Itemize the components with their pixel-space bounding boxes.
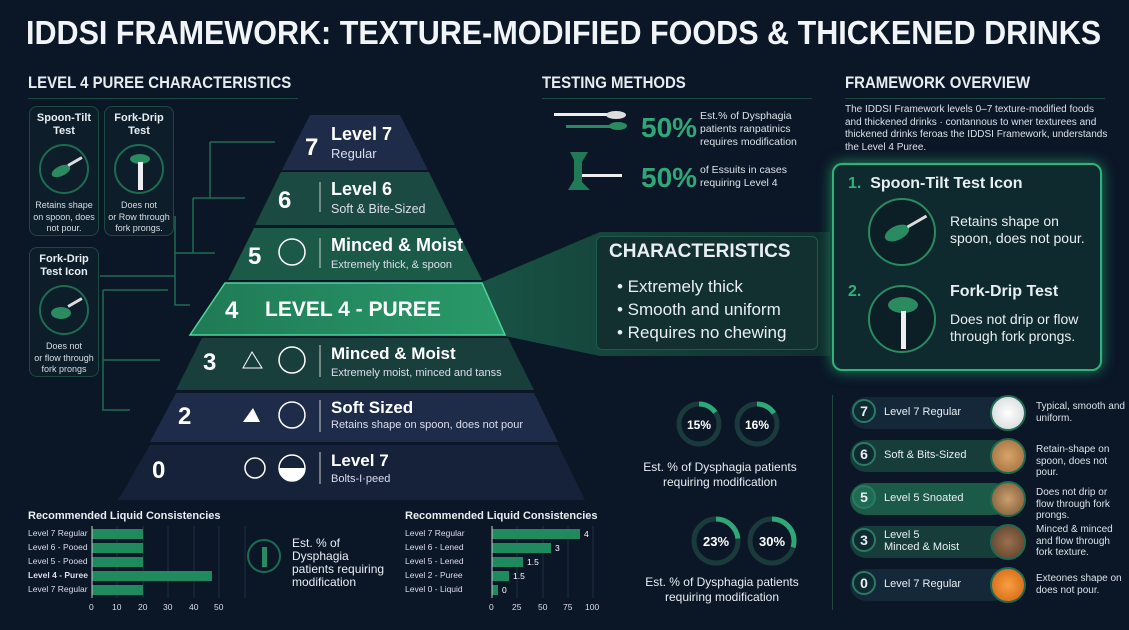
bar chart 2: 75: [563, 602, 573, 612]
row 0: [850, 567, 1122, 603]
row 7: Level 7 Regular: [884, 406, 961, 418]
bar chart 2: Recommended Liquid Consistencies: [405, 510, 598, 522]
level 0 band: [118, 445, 585, 500]
level 3 band: [176, 338, 534, 390]
card: fork-drip test: Fork-Drip: [114, 112, 164, 124]
bar chart 1: 40: [189, 602, 199, 612]
bar chart 2: Level 7 Regular: [405, 528, 465, 538]
bar chart 1: Level 5 - Pooed: [28, 556, 88, 566]
highlight panel: tests: through fork prongs.: [950, 328, 1075, 344]
bar chart 1: 0: [89, 602, 94, 612]
bar chart 1: 20: [138, 602, 148, 612]
card: fork-drip test: or Row through fork prongs.: [108, 212, 170, 233]
level 5 band: 5: [248, 243, 261, 270]
arrows: cards to pyramid: [100, 141, 275, 411]
testing methods stats: [554, 110, 797, 193]
heading: testing methods: TESTING METHODS: [542, 73, 686, 92]
level 3 band: Minced & Moist: [331, 344, 456, 363]
card: fork-drip test: Does not: [121, 200, 157, 210]
card: fork-drip test icon: Test Icon: [40, 266, 88, 278]
bar chart 1: 50: [214, 602, 224, 612]
row 7: Typical, smooth and uniform.: [1036, 401, 1125, 424]
level 2 band: Retains shape on spoon, does not pour: [331, 419, 523, 431]
card: spoon-tilt test: Retains shape on spoon, does not pour.: [33, 200, 95, 233]
card: spoon-tilt test: Spoon-Tilt: [37, 112, 91, 124]
highlight panel: tests: spoon, does not pour.: [950, 230, 1085, 246]
level 4 band: [190, 283, 505, 335]
bar chart 1: Level 4 - Puree: [28, 570, 88, 580]
bar chart 1: [28, 510, 246, 612]
donuts row 2: [645, 516, 799, 604]
level 7 band: Level 7: [331, 124, 392, 144]
bar chart 2: 100: [585, 602, 599, 612]
icon: fork circle with est text: Dysphagia: [292, 549, 349, 563]
donuts row 1: [643, 402, 797, 489]
highlight panel: tests: [832, 163, 1102, 371]
donuts row 2: 30%: [759, 534, 785, 549]
level list: [850, 395, 1125, 603]
level 3 band: 3: [203, 349, 216, 376]
testing methods stats: Est.% of Dysphagia: [700, 110, 792, 122]
icon: spoon tilt: [868, 198, 936, 266]
bar chart 1: Level 6 - Pooed: [28, 542, 88, 552]
card: fork-drip test: [104, 106, 174, 236]
level 5 band: [228, 228, 482, 280]
card: spoon-tilt test: Test: [53, 125, 75, 137]
level 7 band: Regular: [331, 146, 377, 161]
testing methods stats: 50%: [641, 112, 697, 143]
row 6: Retain-shape on spoon, does not pour.: [1036, 444, 1109, 478]
heading: framework overview: [845, 73, 1105, 99]
row 3: Level 5: [884, 529, 919, 541]
bar chart 2: 0: [502, 585, 507, 595]
level 7 band: 7: [305, 134, 318, 161]
card: spoon-tilt test: [29, 106, 99, 236]
level 6 band: [255, 172, 455, 225]
card: fork-drip test icon: or flow through fork prongs: [34, 352, 94, 374]
testing methods stats: 50%: [641, 162, 697, 193]
level 4 band: LEVEL 4 - PUREE: [265, 298, 441, 321]
characteristics box: • Smooth and uniform: [617, 300, 781, 319]
bar chart 2: Level 0 - Liquid: [405, 584, 463, 594]
donuts row 2: 23%: [703, 534, 729, 549]
highlight panel: tests: Does not drip or flow: [950, 311, 1078, 327]
heading: framework overview: FRAMEWORK OVERVIEW: [845, 73, 1030, 92]
level 6 band: 6: [278, 187, 291, 214]
level 2 band: 2: [178, 403, 191, 430]
icon: spoons: [554, 111, 627, 190]
icon: fork circle with est text: modification: [292, 575, 356, 589]
bar chart 2: 0: [489, 602, 494, 612]
level 2 band: Soft Sized: [331, 398, 413, 417]
card: fork-drip test: Test: [128, 125, 150, 137]
highlight panel: tests: Fork-Drip Test: [950, 283, 1058, 300]
level 0 band: Bolts-I·peed: [331, 473, 390, 485]
donuts row 1: 15%: [687, 418, 711, 432]
bar chart 2: 1.5: [527, 557, 539, 567]
bar chart 2: 25: [512, 602, 522, 612]
level 4 band: 4: [225, 297, 239, 324]
bar chart 1: 30: [163, 602, 173, 612]
bar chart 1: 10: [112, 602, 122, 612]
row 3: Minced & minced and flow through fork texture.: [1036, 524, 1113, 558]
level 7 band: [282, 115, 428, 170]
level 3 band: Extremely moist, minced and tanss: [331, 367, 502, 379]
framework overview text: The IDDSI Framework levels 0–7 texture-modified foods and thickened drinks · contannous to wner texturees and thickened drinks feroas the IDDSI Framework, understands the Level 4 Puree.: [845, 104, 1107, 152]
testing methods stats: requiring Level 4: [700, 177, 778, 189]
characteristics box: • Extremely thick: [617, 277, 743, 296]
level 2 band: [150, 393, 558, 442]
row 7: [850, 395, 1125, 431]
row 6: [850, 438, 1109, 478]
donuts row 1: Est. % of Dysphagia patients requiring modification: [643, 460, 797, 489]
icon: fork circle with est text: patients requiring: [292, 562, 384, 576]
row 3: [850, 524, 1113, 560]
characteristics box: CHARACTERISTICS: [609, 241, 791, 262]
beam to characteristics: [480, 232, 830, 356]
bar chart 2: [405, 510, 599, 612]
bar chart 2: 50: [538, 602, 548, 612]
level 0 band: Level 7: [331, 451, 389, 470]
divider line right: [832, 395, 833, 610]
bar chart 2: 4: [584, 529, 589, 539]
bar chart 2: Level 2 - Puree: [405, 570, 463, 580]
icon: fork drip: [868, 285, 936, 353]
highlight panel: tests: Retains shape on: [950, 213, 1059, 229]
highlight panel: tests: 1. Spoon-Tilt Test Icon: [848, 175, 1023, 192]
row 7: 7: [860, 403, 868, 419]
bar chart 2: Level 5 - Lened: [405, 556, 464, 566]
heading: testing methods: [542, 73, 812, 99]
row 5: Does not drip or flow through fork prongs.: [1036, 487, 1110, 521]
row 5: [850, 481, 1110, 521]
icon: fork circle with est text: [247, 536, 384, 589]
card: fork-drip test icon: Fork-Drip: [39, 253, 89, 265]
row 6: 6: [860, 446, 868, 462]
row 0: Exteones shape on does not pour.: [1036, 573, 1122, 596]
bar chart 2: 1.5: [513, 571, 525, 581]
level 5 band: Extremely thick, & spoon: [331, 259, 452, 271]
title: IDDSI FRAMEWORK: TEXTURE-MODIFIED FOODS & THICKENED DRINKS: [26, 14, 1101, 51]
bar chart 1: Level 7 Regular: [28, 584, 88, 594]
row 3: Minced & Moist: [884, 541, 959, 553]
heading: level 4 puree characteristics: LEVEL 4 PUREE CHARACTERISTICS: [28, 73, 291, 92]
highlight panel: tests: 2.: [848, 283, 861, 300]
bar chart 1: Recommended Liquid Consistencies: [28, 510, 221, 522]
bar chart 2: 3: [555, 543, 560, 553]
level 5 band: Minced & Moist: [331, 235, 463, 255]
icon: fork circle with est text: Est. % of: [292, 536, 340, 550]
donuts row 2: Est. % of Dysphagia patients requiring modification: [645, 575, 799, 604]
row 0: Level 7 Regular: [884, 578, 961, 590]
card: fork-drip test icon: [29, 247, 99, 377]
level 6 band: Level 6: [331, 179, 392, 199]
bar chart 1: Level 7 Regular: [28, 528, 88, 538]
row 6: Soft & Bits-Sized: [884, 449, 967, 461]
pyramid: [118, 115, 830, 500]
level 6 band: Soft & Bite-Sized: [331, 202, 426, 216]
card: fork-drip test icon: Does not: [46, 341, 82, 351]
testing methods stats: patients ranpatinics: [700, 123, 790, 135]
row 0: 0: [860, 575, 868, 591]
level 0 band: 0: [152, 457, 165, 484]
characteristics box: • Requires no chewing: [617, 323, 786, 342]
donuts row 1: 16%: [745, 418, 769, 432]
characteristics box: [596, 236, 818, 350]
bar chart 2: Level 6 - Lened: [405, 542, 464, 552]
row 5: Level 5 Snoated: [884, 492, 964, 504]
testing methods stats: requires modification: [700, 136, 797, 148]
row 3: 3: [860, 532, 868, 548]
testing methods stats: of Essuits in cases: [700, 164, 787, 176]
row 5: 5: [860, 489, 868, 505]
